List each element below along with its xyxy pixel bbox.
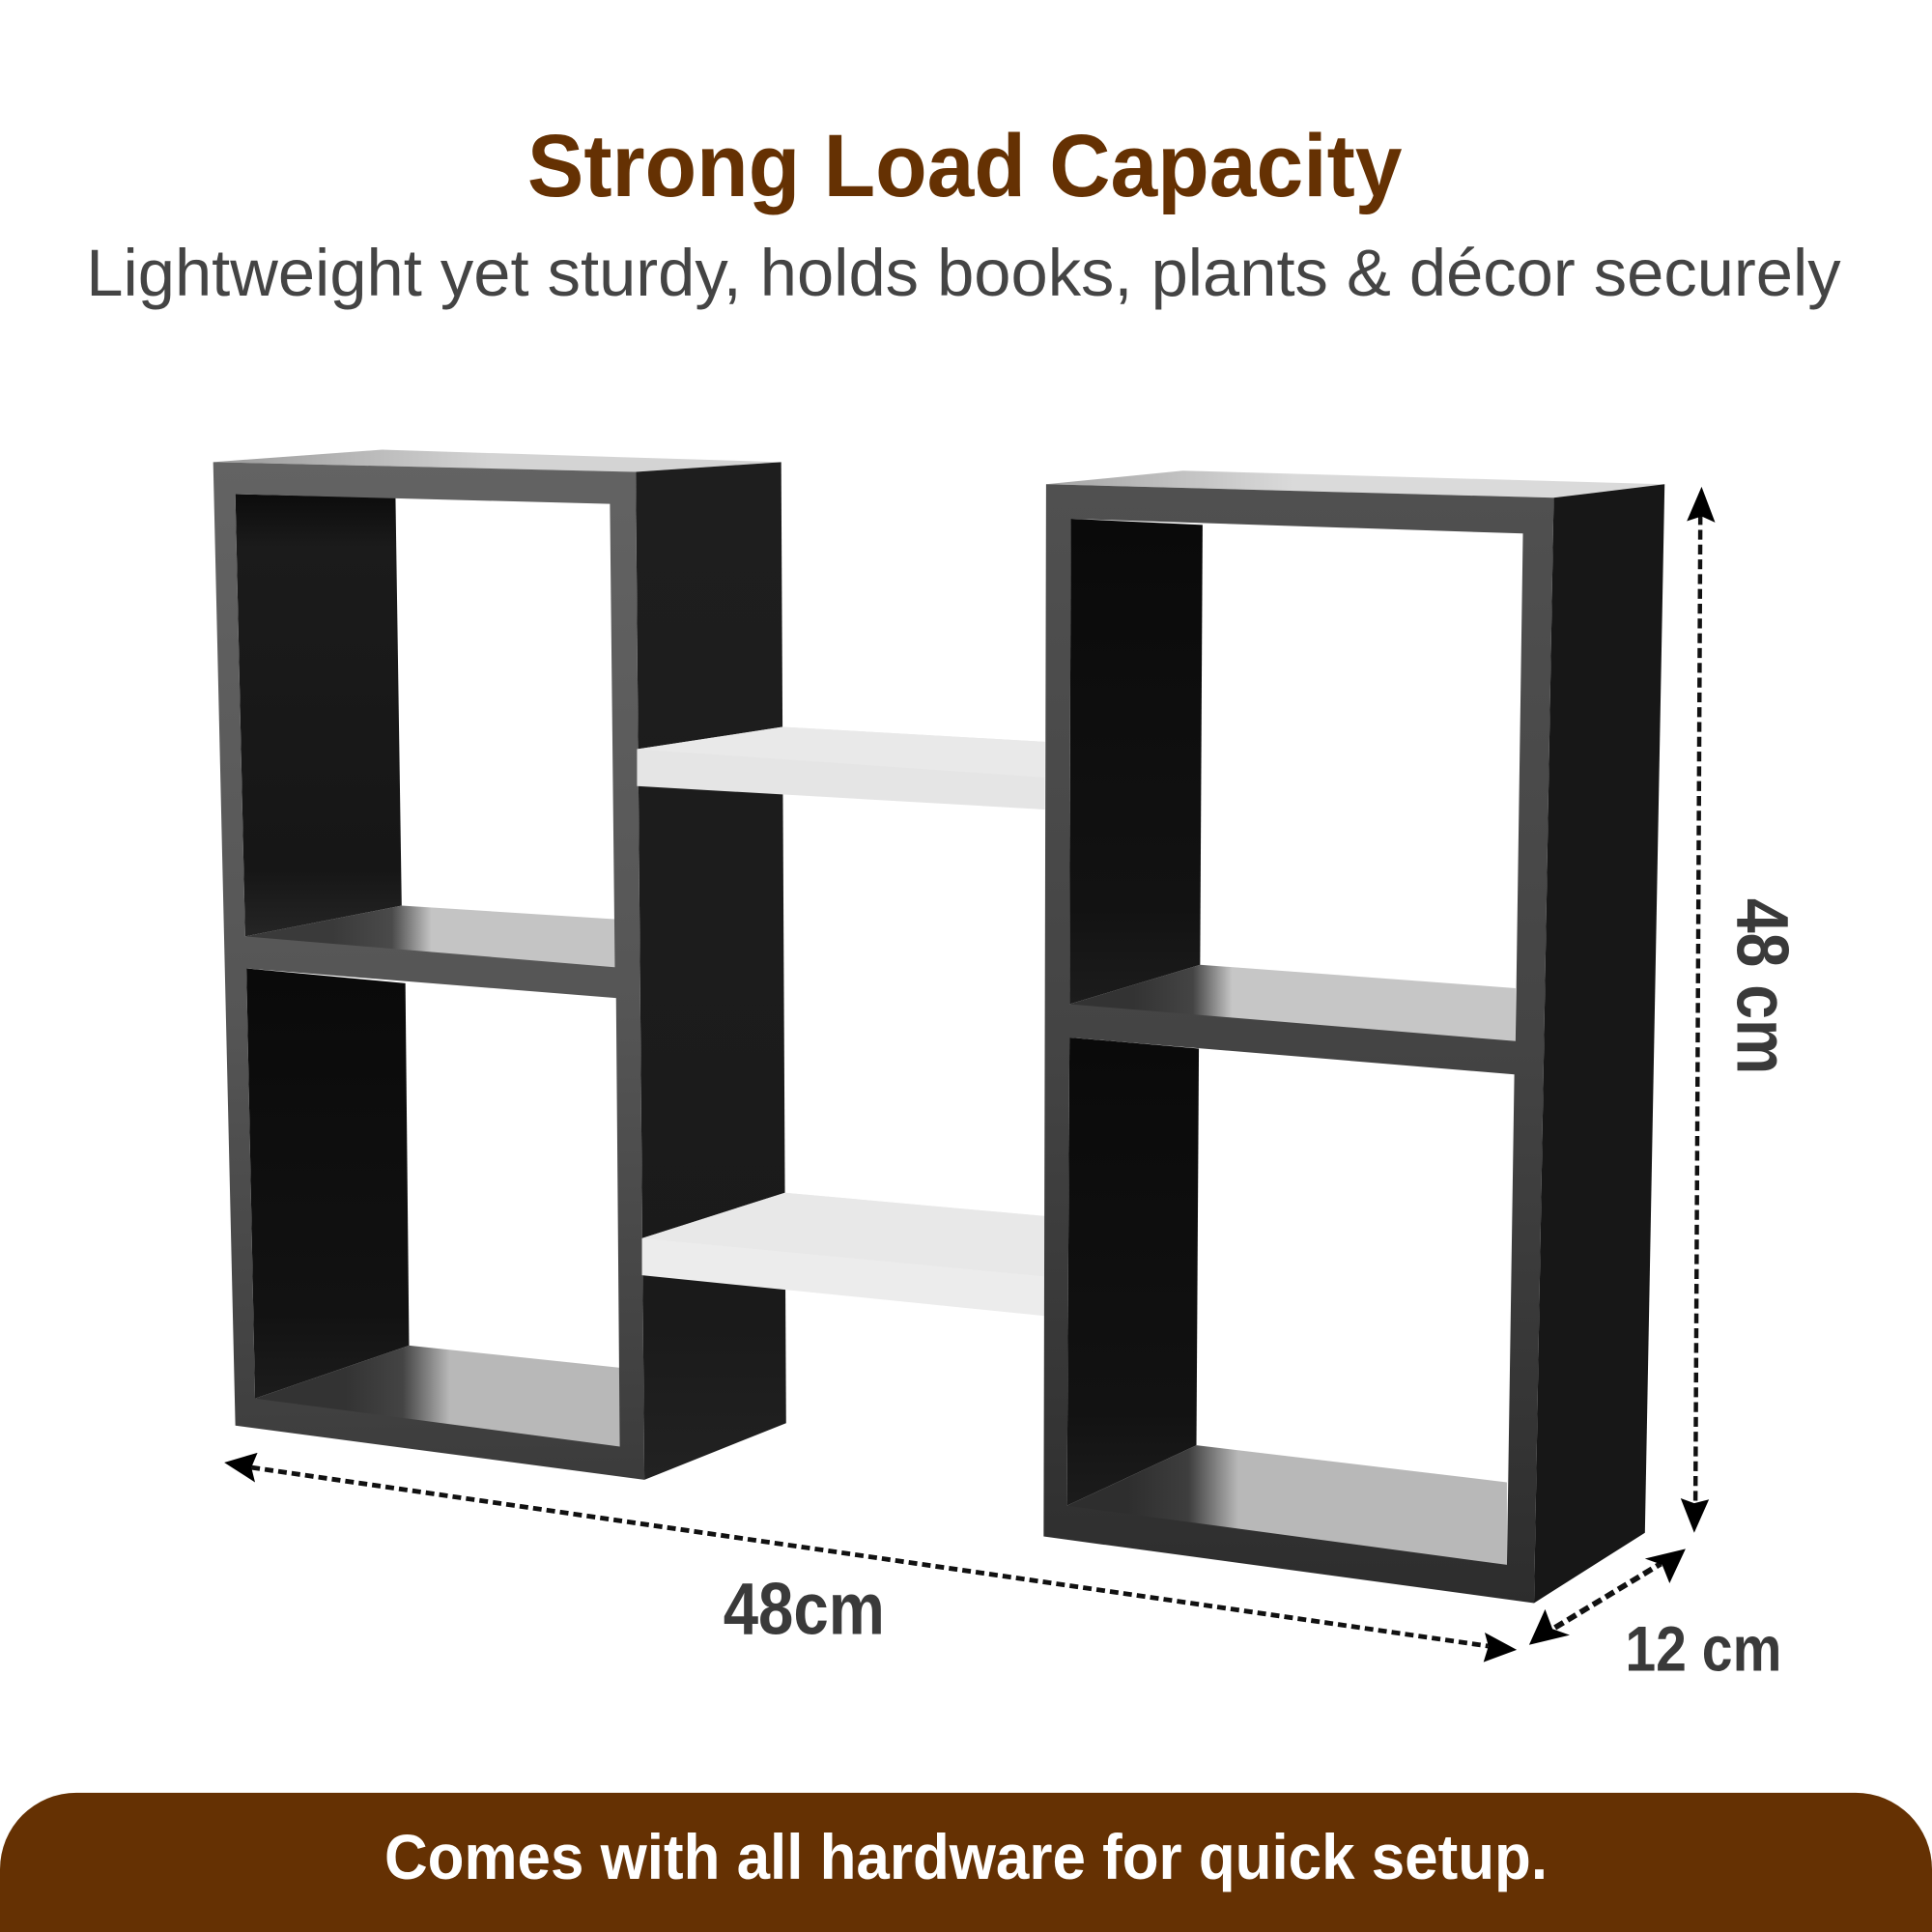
arrow: width dimension: [224, 1453, 1517, 1662]
shelf unit: left: [213, 450, 786, 1480]
arrow: height dimension: [1681, 487, 1716, 1533]
footer banner: [0, 1793, 1932, 1932]
label: depth 12 cm: 12 cm: [1625, 1614, 1781, 1686]
connecting shelf: upper: [637, 727, 1045, 810]
shelf unit: right: [1043, 470, 1664, 1603]
label: width 48cm: 48cm: [724, 1568, 885, 1650]
arrow: depth dimension: [1529, 1548, 1686, 1645]
subtitle: Lightweight yet sturdy, holds books, plants & décor securely: [86, 236, 1841, 310]
label: height 48 cm: 48 cm: [1720, 898, 1803, 1074]
connecting shelf: lower: [642, 1193, 1045, 1316]
footer text: Comes with all hardware for quick setup.: [384, 1822, 1548, 1893]
title: Strong Load Capacity: [527, 117, 1403, 215]
